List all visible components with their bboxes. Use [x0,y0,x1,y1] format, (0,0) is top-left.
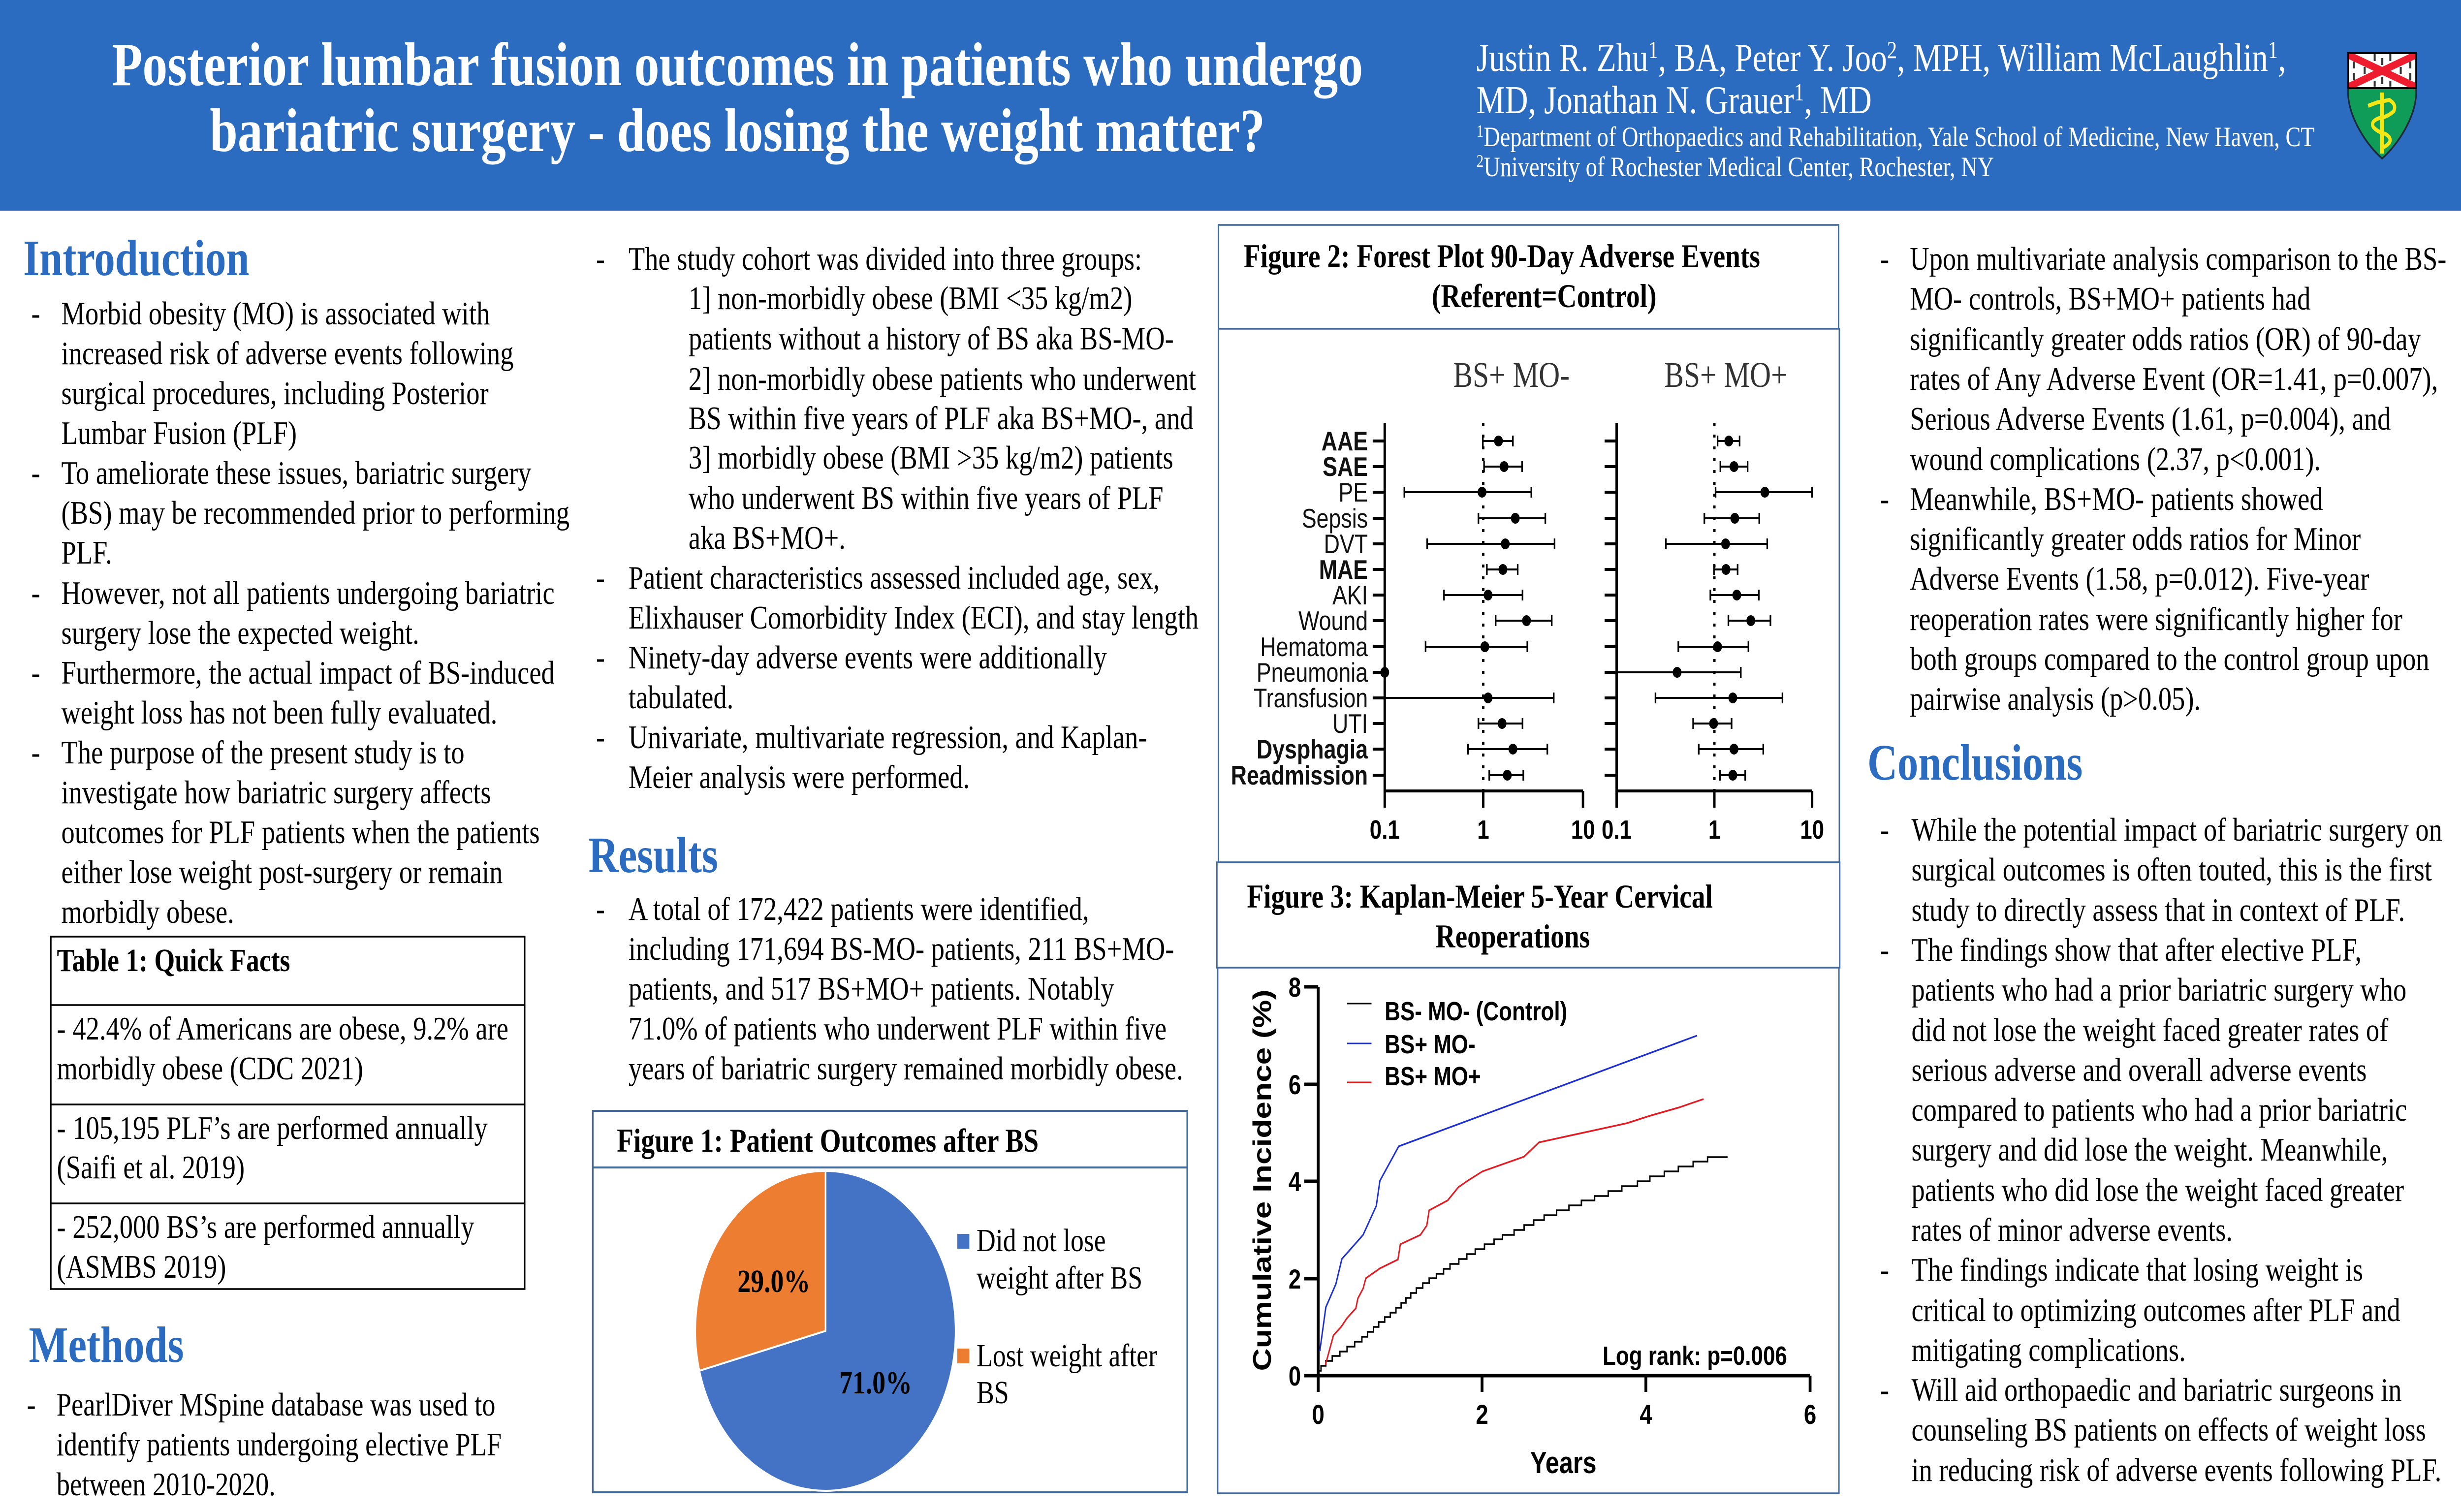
authors: , [2278,36,2286,80]
forest row labels: Sepsis [1302,504,1368,534]
text block: methods continued: - [596,241,605,277]
figure 2 title [1244,238,1760,315]
text block: conclusions: - [1880,1252,1889,1288]
y axis labels: 8 [1289,972,1301,1003]
forest plot: BS+ MO-: 10 [1571,815,1595,845]
affiliations [1477,122,2315,183]
forest row labels: SAE [1323,452,1368,482]
text block: methods continued: BS within five years of PLF aka BS+MO-, and [689,401,1194,437]
forest row labels: Pneumonia [1257,658,1368,688]
figure 1 title: Figure 1: Patient Outcomes after BS [617,1123,1039,1159]
text block: conclusions: patients who did lose the weight faced greater [1911,1172,2404,1208]
heading: Conclusions: Conclusions [1867,734,2082,791]
x axis title: Years [1530,1446,1597,1480]
title [112,30,1363,164]
text block: conclusions: - [1880,932,1889,968]
pie chart: 71.0% [839,1365,912,1401]
text block: introduction bullets: However, not all patients undergoing bariatric [62,575,555,611]
table row: obesity: morbidly obese (CDC 2021) [57,1051,363,1087]
text block: methods continued: Meier analysis were performed. [629,759,970,795]
forest plot: BS+ MO-: 1 [1477,815,1489,845]
pie chart [695,1171,956,1491]
text block: methods continued: Elixhauser Comorbidity Index (ECI), and stay length [629,600,1199,636]
text block: methods continued: Patient characteristics assessed included age, sex, [629,560,1160,596]
text block: results continued: both groups compared to the control group upon [1910,641,2429,677]
text block: conclusions: - [1880,1372,1889,1408]
y axis title: Cumulative Incidence (%) [1248,989,1277,1371]
text block: introduction bullets: surgery lose the expected weight. [62,615,419,651]
text block: results continued: significantly greater odds ratios for Minor [1910,521,2361,557]
text block: methods continued: - [596,640,605,676]
heading: Introduction: Introduction [23,230,249,286]
text block: methods continued: Ninety-day adverse events were additionally [629,640,1107,676]
text block: results continued: Serious Adverse Events (1.61, p=0.004), and [1910,401,2391,437]
forest plot: BS+ MO+: 0.1 [1602,815,1632,845]
text block: conclusions: patients who had a prior bariatric surgery who [1911,972,2406,1008]
authors: , MPH, William McLaughlin [1897,36,2268,80]
text block: methods continued: tabulated. [629,680,733,716]
forest row labels [1231,426,1368,790]
figure 3 title: Reoperations [1436,918,1590,955]
text block: introduction bullets [31,296,569,930]
text block: results continued: pairwise analysis (p>0.05). [1910,681,2201,717]
forest plot: BS+ MO-: 0.1 [1370,815,1400,845]
curve: BS+ MO- [1320,1036,1697,1351]
text block: methods first bullet: PearlDiver MSpine database was used to [57,1387,496,1423]
text block: results continued: MO- controls, BS+MO+ patients had [1910,281,2310,317]
table row: PLF [57,1110,488,1186]
forest group labels [1453,355,1788,395]
text block: conclusions: The findings show that after elective PLF, [1911,932,2362,968]
text block: introduction bullets: weight loss has not been fully evaluated. [62,695,497,731]
heading: Results: Results [588,827,718,883]
text block: results first bullet: 71.0% of patients who underwent PLF within five [629,1011,1167,1047]
chart legend: BS- MO- (Control) [1385,997,1567,1026]
affiliations: 1 [1477,122,1483,141]
text block: introduction bullets: PLF. [62,535,112,571]
affiliations: 2 [1477,152,1483,171]
text block: results continued: - [1880,241,1889,277]
curve: BS+ MO+ [1325,1099,1704,1365]
authors: 1 [1648,36,1658,63]
text block: introduction bullets: outcomes for PLF patients when the patients [62,815,540,850]
forest row labels: UTI [1332,709,1368,739]
forest plot: BS+ MO- [1370,423,1595,845]
icon: Yale medicine crest [2348,53,2416,158]
text block: results continued: Adverse Events (1.58, p=0.012). Five-year [1910,561,2369,597]
heading: Methods: Methods [29,1317,184,1373]
authors: 2 [1887,36,1897,63]
text block: conclusions: did not lose the weight faced greater rates of [1911,1012,2389,1048]
x axis labels [1312,1399,1816,1430]
forest group labels: BS+ MO+ [1664,355,1788,395]
y axis labels: 0 [1289,1361,1301,1391]
title: bariatric surgery - does losing the weight matter? [210,96,1265,164]
text block: results continued: wound complications (2.37, p<0.001). [1910,441,2321,477]
table row: PLF: - 105,195 PLF’s are performed annually [57,1110,488,1146]
x axis labels: 6 [1804,1399,1816,1430]
table row: obesity [57,1011,508,1087]
text block: conclusions: surgical outcomes is often touted, this is the first [1911,852,2432,888]
forest row labels: AAE [1322,426,1368,456]
forest row labels: DVT [1324,529,1368,559]
text block: results first bullet: - [596,891,605,927]
y axis labels: 4 [1289,1166,1301,1197]
table row: BS [57,1209,474,1285]
text block: conclusions: compared to patients who had a prior bariatric [1911,1092,2407,1128]
text block: methods first bullet: - [27,1387,36,1423]
text block: methods first bullet: identify patients undergoing elective PLF [57,1427,502,1463]
panel: Table 1 quick facts [51,937,525,1289]
panel: Figure 3 Kaplan-Meier chart [1217,862,1840,1493]
text block: conclusions: in reducing risk of adverse events following PLF. [1911,1452,2441,1488]
text block: introduction bullets: surgical procedures, including Posterior [62,376,489,411]
affiliations: University of Rochester Medical Center, Rochester, NY [1483,152,1994,183]
text block: introduction bullets: - [31,735,40,771]
forest row labels: PE [1338,477,1368,507]
text block: conclusions: The findings indicate that losing weight is [1911,1252,2363,1288]
text block: introduction bullets: either lose weight post-surgery or remain [62,854,503,890]
text block: conclusions: - [1880,812,1889,848]
pie legend: Lost weight after [977,1338,1157,1374]
pie legend: Did not lose [977,1223,1106,1259]
authors: Justin R. Zhu [1477,36,1648,80]
table row: PLF: (Saifi et al. 2019) [57,1150,245,1186]
pie chart: 29.0% [737,1263,810,1299]
text block: results continued: - [1880,481,1889,517]
y axis labels: 2 [1289,1264,1301,1294]
figure 2 title: Figure 2: Forest Plot 90-Day Adverse Events [1244,238,1760,275]
text block: methods first bullet: between 2010-2020. [57,1467,276,1503]
authors: MD, Jonathan N. Grauer [1477,78,1794,122]
chart legend [1347,997,1567,1091]
pie legend: weight after BS [977,1260,1142,1296]
text block: methods continued: The study cohort was divided into three groups: [629,241,1142,277]
text block: conclusions: study to directly assess that in context of PLF. [1911,892,2405,928]
text block: introduction bullets: increased risk of adverse events following [62,336,514,372]
text block: introduction bullets: investigate how bariatric surgery affects [62,775,491,811]
text block: conclusions: mitigating complications. [1911,1332,2186,1368]
y axis labels [1289,972,1301,1391]
forest row labels: Hematoma [1260,632,1368,662]
forest row labels: Readmission [1231,760,1368,790]
text block: introduction bullets: - [31,575,40,611]
panel: header banner [0,0,2461,211]
text block: introduction bullets: Furthermore, the actual impact of BS-induced [62,655,555,691]
text block: conclusions: critical to optimizing outcomes after PLF and [1911,1292,2400,1328]
text block: results continued: rates of Any Adverse Event (OR=1.41, p=0.007), [1910,361,2438,397]
text block: introduction bullets: (BS) may be recommended prior to performing [62,495,569,531]
authors: 1 [1794,78,1804,106]
forest plot: BS+ MO+: 1 [1708,815,1720,845]
figure 3 title [1247,879,1713,955]
forest plot: BS+ MO+: 10 [1800,815,1824,845]
forest row labels: AKI [1332,580,1368,610]
text block: results first bullet: A total of 172,422 patients were identified, [629,891,1089,927]
forest plot: BS+ MO+ [1602,423,1824,845]
chart axes [1304,987,1810,1392]
figure 2 title: (Referent=Control) [1432,278,1657,315]
text block: results continued: Upon multivariate analysis comparison to the BS- [1910,241,2446,277]
curve: control [1318,1157,1728,1371]
panel: Figure 1 pie chart [593,1111,1187,1492]
authors [1477,36,2286,122]
text block: methods continued [596,241,1199,795]
text block: methods continued: Univariate, multivariate regression, and Kaplan- [629,720,1147,756]
forest group labels: BS+ MO- [1453,355,1570,395]
text block: conclusions: While the potential impact of bariatric surgery on [1911,812,2442,848]
authors: 1 [2268,36,2278,63]
table row: BS: - 252,000 BS’s are performed annually [57,1209,474,1245]
figure 3 title: Figure 3: Kaplan-Meier 5-Year Cervical [1247,879,1713,915]
x axis labels: 4 [1640,1399,1652,1430]
text block: introduction bullets: morbidly obese. [62,894,234,930]
text block: methods continued: - [596,720,605,756]
y axis labels: 6 [1289,1070,1301,1100]
text block: methods continued: aka BS+MO+. [689,520,846,556]
forest row labels: Dysphagia [1257,734,1368,764]
text block: introduction bullets: - [31,455,40,491]
text block: conclusions: Will aid orthopaedic and bariatric surgeons in [1911,1372,2402,1408]
text block: methods first bullet [27,1387,502,1503]
text block: results continued [1880,241,2446,717]
table row: BS: (ASMBS 2019) [57,1249,226,1285]
affiliations: Department of Orthopaedics and Rehabilitation, Yale School of Medicine, New Haven, CT [1483,122,2315,153]
text block: methods continued: 3] morbidly obese (BMI >35 kg/m2) patients [689,440,1173,476]
text block: results continued: Meanwhile, BS+MO- patients showed [1910,481,2323,517]
text block: introduction bullets: Lumbar Fusion (PLF) [62,415,297,451]
table row: obesity: - 42.4% of Americans are obese, 9.2% are [57,1011,508,1047]
text block: results continued: reoperation rates were significantly higher for [1910,601,2402,637]
x axis labels: 2 [1476,1399,1488,1430]
text block: conclusions: counseling BS patients on effects of weight loss [1911,1412,2426,1448]
text block: introduction bullets: - [31,296,40,332]
text block: methods continued: patients without a history of BS aka BS-MO- [689,321,1174,357]
text block: methods continued: who underwent BS within five years of PLF [689,480,1164,516]
text block: conclusions: rates of minor adverse events. [1911,1212,2233,1248]
text block: conclusions: serious adverse and overall adverse events [1911,1052,2366,1088]
text block: results continued: significantly greater odds ratios (OR) of 90-day [1910,321,2421,357]
text block: introduction bullets: Morbid obesity (MO) is associated with [62,296,490,332]
chart legend: BS+ MO- [1385,1030,1476,1059]
pie legend [957,1223,1157,1411]
text block: methods continued: 2] non-morbidly obese patients who underwent [689,361,1196,397]
title: Posterior lumbar fusion outcomes in patients who undergo [112,30,1363,98]
forest row labels: Wound [1298,606,1368,636]
text block: conclusions [1880,812,2442,1488]
text block: results first bullet: years of bariatric surgery remained morbidly obese. [629,1051,1183,1087]
text block: results first bullet: patients, and 517 BS+MO+ patients. Notably [629,971,1114,1007]
text block: introduction bullets: The purpose of the present study is to [62,735,465,771]
log rank annotation: Log rank: p=0.006 [1603,1341,1787,1371]
text block: results first bullet [596,891,1183,1087]
chart legend: BS+ MO+ [1385,1062,1481,1091]
table heading: Table 1: Quick Facts [57,943,290,978]
panel: Figure 2 forest plot [1219,225,1839,862]
authors: , MD [1804,78,1872,122]
text block: methods continued: 1] non-morbidly obese (BMI <35 kg/m2) [689,281,1132,316]
text block: methods continued: - [596,560,605,596]
text block: conclusions: surgery and did lose the weight. Meanwhile, [1911,1132,2388,1168]
x axis labels: 0 [1312,1399,1325,1430]
authors: , BA, Peter Y. Joo [1658,36,1887,80]
pie legend: BS [977,1375,1009,1411]
forest row labels: Transfusion [1254,683,1368,713]
forest row labels: MAE [1319,555,1368,585]
text block: introduction bullets: To ameliorate these issues, bariatric surgery [62,455,532,491]
text block: results first bullet: including 171,694 BS-MO- patients, 211 BS+MO- [629,931,1174,967]
text block: introduction bullets: - [31,655,40,691]
